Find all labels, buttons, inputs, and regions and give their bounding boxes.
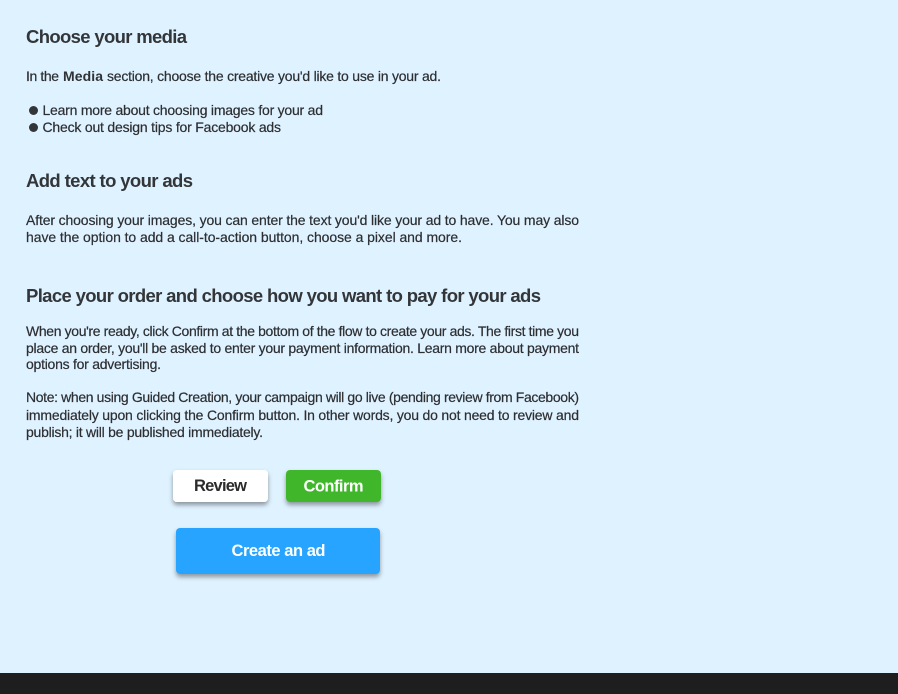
text block: media intro: Media (63, 68, 103, 84)
button: create an ad (176, 528, 380, 574)
heading: choose your media: Choose your media (26, 26, 188, 47)
text block: confirm instructions: options for advertising. (26, 356, 161, 372)
heading: place your order: Place your order and choose how you want to pay for your ads (26, 285, 541, 306)
text block: confirm instructions (26, 323, 579, 372)
text block: guided creation note: immediately upon clicking the Confirm button. In other words, you do not need to review and (26, 407, 579, 423)
text block: media intro: section, choose the creative you'd like to use in your ad. (107, 68, 441, 84)
text block: add text description: After choosing your images, you can enter the text you'd like your ad to have. You may also (26, 212, 579, 228)
button: confirm: Confirm (304, 478, 364, 496)
bullet list: media links (29, 102, 323, 135)
button: confirm (286, 470, 381, 502)
text block: add text description (26, 212, 579, 245)
text block: guided creation note: publish; it will be published immediately. (26, 424, 263, 440)
heading: add text to your ads: Add text to your ads (26, 170, 193, 191)
bullet item: choosing images: Learn more about choosing images for your ad (42, 102, 323, 118)
text block: guided creation note (26, 389, 579, 440)
button: review (173, 470, 268, 502)
text block: guided creation note: Note: when using Guided Creation, your campaign will go live (pending review from Facebook) (26, 389, 579, 405)
button: create an ad: Create an ad (232, 542, 326, 560)
text block: add text description: have the option to add a call-to-action button, choose a pixel and more. (26, 229, 462, 245)
text block: media intro: In the (26, 68, 59, 84)
bullet item: design tips: Check out design tips for Facebook ads (42, 119, 281, 135)
text block: confirm instructions: When you're ready, click Confirm at the bottom of the flow to create your ads. The first time you (26, 323, 579, 339)
button: review: Review (194, 477, 247, 495)
text block: confirm instructions: place an order, you'll be asked to enter your payment information. Learn more about payment (26, 340, 579, 356)
footer bar (0, 673, 898, 694)
